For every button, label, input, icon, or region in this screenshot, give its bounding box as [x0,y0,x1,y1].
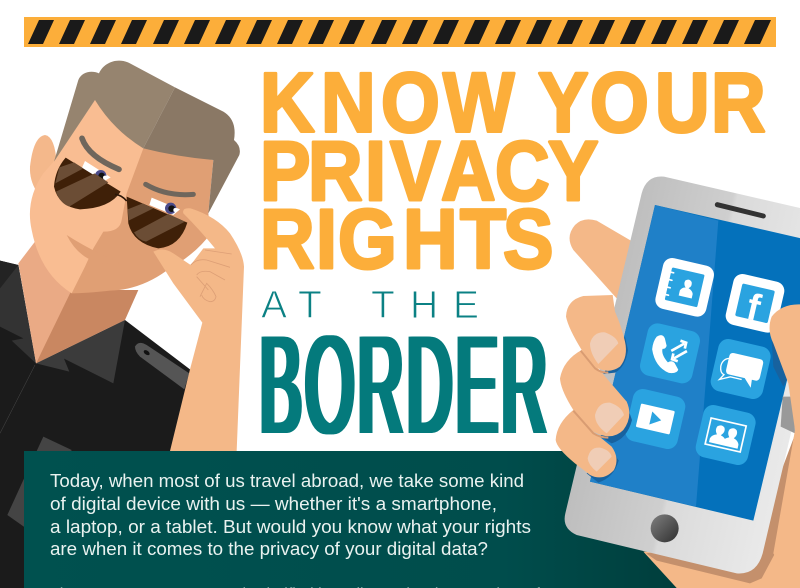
illustration: man with sunglasses [0,61,244,588]
title: border: BORDER [260,306,550,462]
app icon: phone call [638,321,702,385]
intro paragraph [50,470,541,588]
middle finger [560,350,629,436]
fingernails [588,332,624,472]
phone screen [590,205,800,521]
subtitle: at the: AT THE [261,284,479,327]
title: know your privacy rights [260,56,766,286]
panel: introduction [24,451,690,588]
hair [54,61,240,213]
app icon: video player [623,387,687,451]
app icon: facebook [724,272,786,335]
intro paragraph: a laptop, or a tablet. But would you know what your rights [50,516,531,537]
index finger [566,295,626,371]
shirt [0,261,200,588]
app icon: facebook: f [743,285,765,329]
neck [18,242,138,363]
intro paragraph: of digital device with us — whether it's a smartphone, [50,493,497,514]
shoulder strap [135,343,189,389]
thumb and palm [770,304,800,588]
hand adjusting sunglasses [153,208,244,451]
title: know your privacy rights: KNOW YOUR [260,56,766,149]
sunglasses [54,158,187,248]
app icon: photo frame [694,403,758,467]
title: know your privacy rights: PRIVACY [260,124,598,218]
intro paragraph: Today, when most of us travel abroad, we take some kind [50,470,524,491]
intro paragraph: are when it comes to the privacy of your digital data? [50,538,488,559]
palm shadow under phone [646,430,797,583]
phone body [565,177,800,573]
phone edge shade and thumb shadow [772,340,795,433]
eyes [82,161,180,215]
app icon: chat bubbles [709,337,773,401]
hazard stripe banner [24,17,776,47]
fingers holding phone [556,295,629,477]
title: know your privacy rights: RIGHTS [260,192,553,286]
finger shadows on screen [587,337,632,483]
face [30,100,213,293]
finger behind phone [570,219,637,298]
illustration: hand holding smartphone [556,177,800,588]
knuckle shading [573,351,608,438]
shirt collar and lapel shading [0,261,125,533]
phone home button [651,514,679,542]
phone speaker [717,205,763,216]
ring finger [556,410,617,477]
palm below phone [643,503,800,588]
ear [30,135,57,192]
app icon: contacts [653,256,716,319]
eyebrows [82,138,193,195]
